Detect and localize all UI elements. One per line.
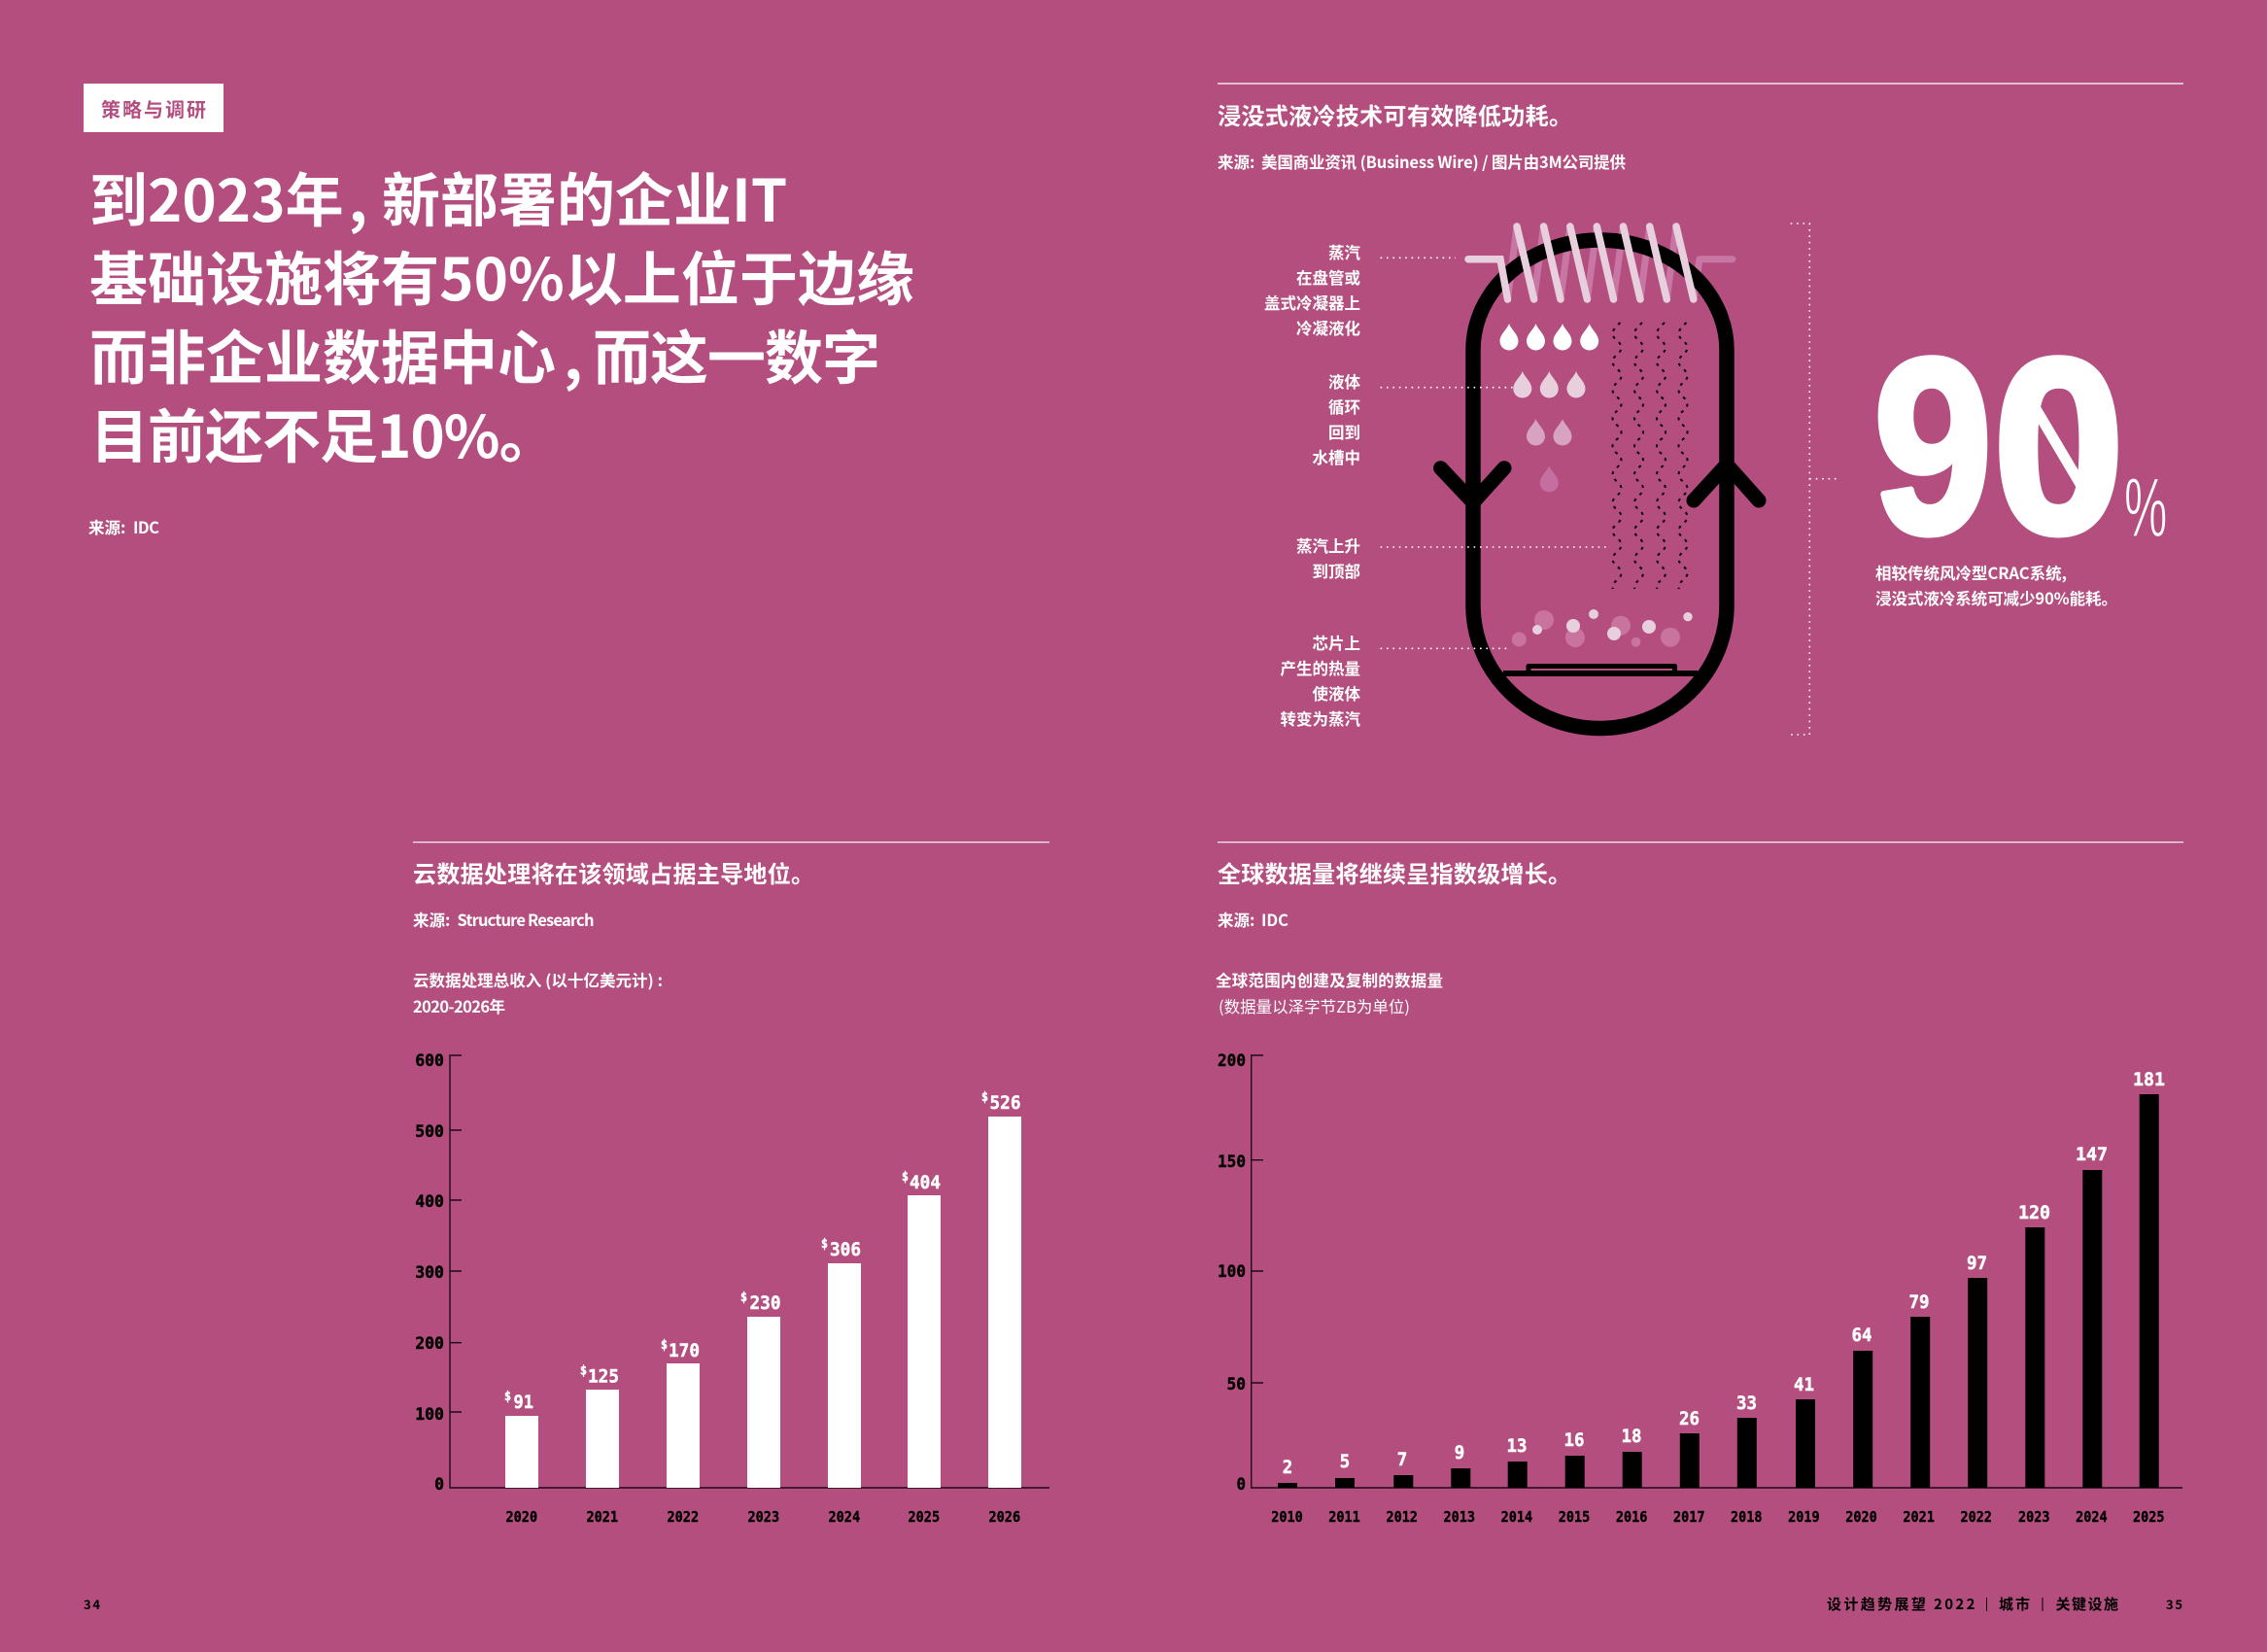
x axis labels: 2011 [1328, 1508, 1360, 1526]
diagram labels: 回到 [1328, 420, 1360, 443]
footer running title [1827, 1594, 2182, 1614]
heading source [88, 515, 159, 538]
diagram labels: 水槽中 [1312, 445, 1360, 468]
diagram labels: 蒸汽 [1328, 240, 1360, 263]
diagram labels: 芯片上 [1312, 631, 1360, 654]
panel: immersion cooling [1218, 84, 2183, 735]
x axis labels: 2017 [1673, 1508, 1704, 1526]
diagram labels: 到顶部 [1312, 559, 1360, 582]
cooling vessel [1473, 240, 1727, 729]
x axis labels [505, 1508, 1020, 1526]
y axis labels [1218, 1051, 1246, 1494]
y axis labels: 400 [415, 1192, 444, 1211]
bar value labels: 7 [1397, 1449, 1407, 1470]
bubbles [1512, 609, 1693, 647]
y axis labels: 150 [1218, 1153, 1246, 1171]
bar value labels: 170 [669, 1340, 700, 1361]
diagram labels: 液体 [1328, 369, 1360, 393]
x axis labels: 2022 [1960, 1508, 1992, 1526]
coil back strands [1508, 226, 1733, 299]
x axis labels: 2021 [587, 1508, 618, 1526]
y axis labels: 0 [1236, 1475, 1246, 1494]
bar value labels: 33 [1736, 1393, 1757, 1414]
y axis labels: 50 [1226, 1375, 1246, 1394]
bar value labels: $ [661, 1338, 668, 1353]
panel source: Structure Research [457, 908, 595, 931]
main heading: 新部署的企业IT [382, 155, 787, 239]
bar value labels: 26 [1679, 1408, 1700, 1429]
panel: cloud revenue chart [413, 843, 1049, 1526]
bar value labels: $ [902, 1170, 909, 1185]
y axis labels: 200 [1218, 1051, 1246, 1070]
panel source: 来源: [1218, 908, 1254, 931]
arrow: vapor going up [1694, 465, 1759, 500]
chart subtitle: (数据量以泽字节ZB为单位) [1219, 994, 1410, 1017]
main heading: 目前还不足10%。 [90, 391, 557, 475]
main heading: 基础设施将有50%以上位于边缘 [89, 233, 914, 318]
bar value labels [504, 1090, 1020, 1413]
bar value labels: 79 [1908, 1291, 1930, 1313]
panel source: 来源: [1218, 150, 1254, 173]
x axis labels: 2023 [2018, 1508, 2050, 1526]
section tag [84, 84, 223, 132]
bar value labels: 97 [1967, 1253, 1987, 1274]
bar value labels: 147 [2076, 1144, 2108, 1165]
bar value labels: 120 [2018, 1202, 2050, 1223]
panel title: 浸没式液冷技术可有效降低功耗。 [1218, 97, 1572, 131]
diagram labels: 转变为蒸汽 [1281, 706, 1360, 730]
x axis labels: 2014 [1501, 1508, 1532, 1526]
condensed droplets [1500, 324, 1598, 492]
bars [505, 1117, 1021, 1488]
x axis labels: 2025 [2133, 1508, 2165, 1526]
diagram labels: 冷凝液化 [1296, 316, 1360, 339]
big stat 90%: % [2124, 461, 2167, 554]
stat caption: 相较传统风冷型CRAC系统, [1875, 561, 2067, 584]
bars [1278, 1094, 2159, 1488]
main heading [89, 155, 914, 475]
x axis labels: 2026 [989, 1508, 1020, 1526]
big stat 90%: 0 [1993, 307, 2124, 585]
footer running title: 城市 [1999, 1594, 2030, 1614]
bar value labels: 404 [910, 1172, 941, 1193]
bar value labels: $ [740, 1291, 747, 1305]
bar value labels: $ [580, 1364, 587, 1378]
stat caption: 浸没式液冷系统可减少90%能耗。 [1875, 586, 2117, 609]
bar value labels: 13 [1506, 1435, 1528, 1457]
diagram labels: 产生的热量 [1281, 656, 1360, 679]
x axis labels: 2019 [1788, 1508, 1820, 1526]
heading source: IDC [133, 515, 159, 538]
y axis labels: 600 [415, 1051, 444, 1070]
bar value labels: 306 [830, 1239, 861, 1260]
chart subtitle [413, 968, 663, 1017]
x axis labels: 2016 [1616, 1508, 1647, 1526]
x axis labels: 2013 [1444, 1508, 1475, 1526]
bar value labels: 230 [750, 1292, 781, 1314]
bar value labels: 526 [989, 1092, 1020, 1114]
x axis labels: 2021 [1903, 1508, 1935, 1526]
bar value labels: $ [504, 1390, 511, 1404]
leader lines [1381, 224, 1838, 735]
rising vapor waves [1613, 323, 1687, 622]
bar value labels: 181 [2133, 1069, 2165, 1090]
coil front strands [1468, 226, 1694, 299]
x axis labels: 2022 [667, 1508, 699, 1526]
main heading: 到2023年, [89, 155, 367, 239]
bar value labels: 2 [1283, 1457, 1292, 1478]
stat caption [1875, 561, 2117, 609]
chart subtitle: 全球范围内创建及复制的数据量 [1216, 968, 1443, 991]
arrow: liquid going down [1441, 468, 1504, 502]
diagram labels: 循环 [1328, 395, 1360, 418]
footer running title: 35 [2166, 1595, 2182, 1613]
y axis labels: 0 [434, 1475, 444, 1494]
panel title: 云数据处理将在该领域占据主导地位。 [413, 855, 814, 889]
y axis labels: 500 [415, 1122, 444, 1141]
bar value labels: 16 [1564, 1429, 1584, 1451]
panel: global data volume chart [1216, 843, 2183, 1526]
x axis labels: 2018 [1731, 1508, 1763, 1526]
bar value labels: 18 [1621, 1426, 1642, 1447]
x axis labels: 2023 [748, 1508, 779, 1526]
panel source: 美国商业资讯 (Business Wire) / 图片由3M公司提供 [1261, 150, 1626, 173]
chip on base plate [1503, 667, 1698, 673]
bar value labels: 64 [1852, 1325, 1872, 1346]
axes [450, 1055, 1049, 1488]
y axis labels [415, 1051, 444, 1494]
bar value labels: 5 [1340, 1451, 1350, 1472]
y axis labels: 300 [415, 1263, 444, 1282]
x axis labels: 2024 [828, 1508, 860, 1526]
section tag: 策略与调研 [101, 94, 206, 122]
x axis labels [1271, 1508, 2165, 1526]
x axis labels: 2012 [1386, 1508, 1418, 1526]
bar value labels: 125 [588, 1366, 619, 1388]
diagram labels: 盖式冷凝器上 [1264, 291, 1360, 314]
footer running title: 关键设施 [2056, 1594, 2118, 1614]
panel source: 来源: [413, 908, 450, 931]
axes [1252, 1055, 2182, 1488]
panel title: 全球数据量将继续呈指数级增长。 [1218, 855, 1571, 889]
diagram labels [1264, 240, 1360, 730]
diagram labels: 在盘管或 [1296, 265, 1360, 289]
bar value labels: $ [821, 1237, 828, 1252]
big stat 90%: 9 [1873, 307, 1992, 585]
main heading: 而这一数字 [593, 312, 880, 396]
panel source: IDC [1261, 908, 1288, 931]
left page number: 34 [84, 1595, 100, 1613]
heading source: 来源: [88, 515, 125, 538]
x axis labels: 2020 [505, 1508, 537, 1526]
chart subtitle: 云数据处理总收入 (以十亿美元计) : [413, 968, 663, 991]
bar value labels [1283, 1069, 2165, 1478]
chart subtitle [1216, 968, 1443, 1017]
diagram labels: 蒸汽上升 [1296, 533, 1360, 557]
x axis labels: 2015 [1559, 1508, 1590, 1526]
y axis labels: 200 [415, 1334, 444, 1353]
x axis labels: 2010 [1271, 1508, 1303, 1526]
panel source [1218, 908, 1288, 931]
y axis labels: 100 [1218, 1262, 1246, 1281]
x axis labels: 2020 [1845, 1508, 1877, 1526]
x axis labels: 2025 [908, 1508, 940, 1526]
y axis labels: 100 [415, 1405, 444, 1424]
diagram labels: 使液体 [1312, 681, 1360, 705]
bar value labels: 41 [1794, 1374, 1814, 1395]
footer running title: 设计趋势展望 2022 [1827, 1594, 1975, 1614]
bar value labels: 91 [513, 1392, 533, 1413]
bar value labels: 9 [1455, 1442, 1464, 1463]
bar value labels: $ [981, 1090, 988, 1105]
main heading: 而非企业数据中心, [89, 312, 583, 396]
x axis labels: 2024 [2076, 1508, 2108, 1526]
big stat 90% [1873, 307, 2167, 585]
chart subtitle: 2020-2026年 [413, 994, 505, 1017]
